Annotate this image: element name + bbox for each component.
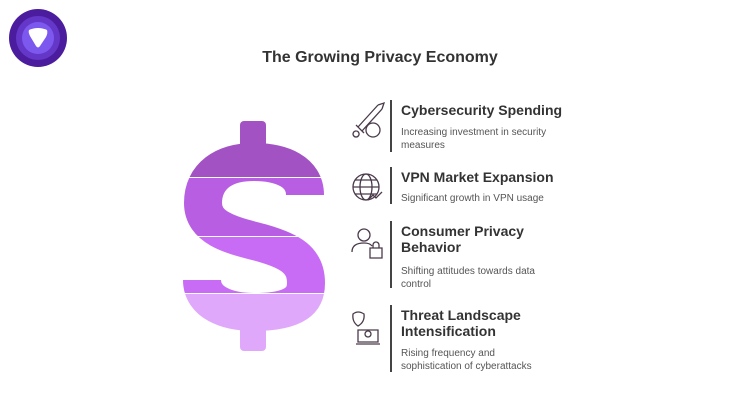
icons <box>352 103 384 344</box>
title: The Growing Privacy Economy <box>262 49 498 66</box>
text: Cybersecurity Spending <box>401 102 562 118</box>
dollar sign <box>183 102 385 351</box>
text: Threat Landscape <box>401 307 521 323</box>
text: control <box>401 279 431 290</box>
text: Behavior <box>401 239 461 255</box>
text: sophistication of cyberattacks <box>401 361 532 372</box>
item 1 <box>390 100 562 152</box>
item 2 <box>390 167 554 204</box>
item 3 <box>390 221 535 290</box>
text: VPN Market Expansion <box>401 169 554 185</box>
text: measures <box>401 140 445 151</box>
text: Rising frequency and <box>401 348 495 359</box>
item 4 <box>390 305 532 372</box>
text: Significant growth in VPN usage <box>401 193 544 204</box>
logo <box>9 9 67 67</box>
text: Intensification <box>401 323 496 339</box>
text: Increasing investment in security <box>401 127 546 138</box>
text: Consumer Privacy <box>401 223 524 239</box>
text: Shifting attitudes towards data <box>401 266 535 277</box>
